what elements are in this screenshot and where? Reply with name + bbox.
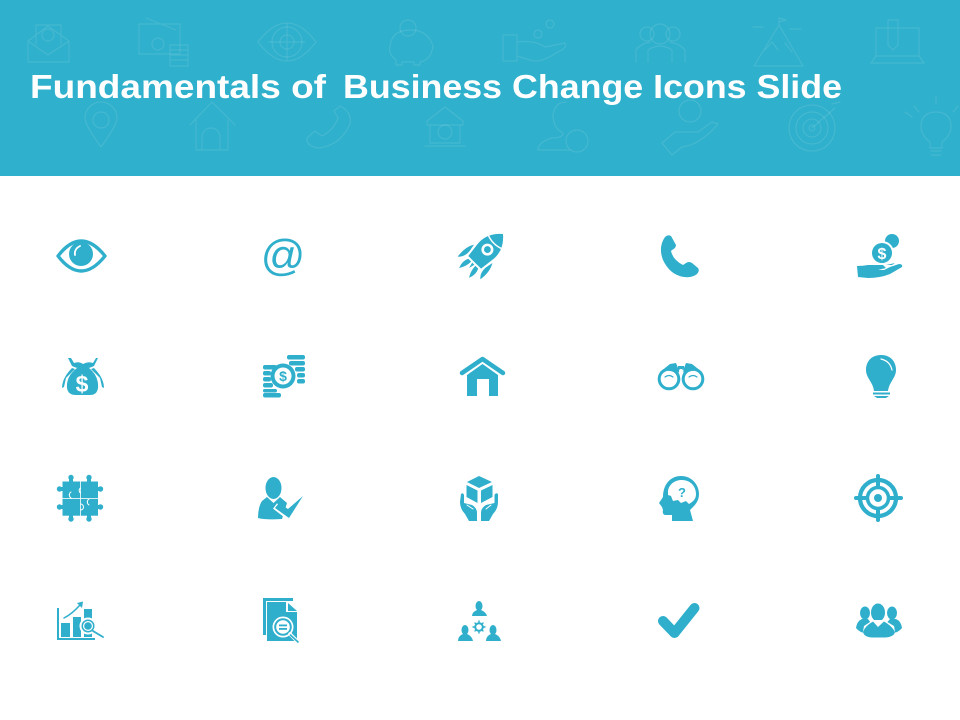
icon: check mark [663, 608, 694, 633]
icon grid [57, 222, 902, 642]
icon: money bag [62, 358, 104, 397]
icon: target crosshair [856, 476, 901, 520]
icon: team [856, 602, 902, 638]
icon: head with question mark: ? [678, 485, 686, 500]
icon: phone [661, 235, 699, 277]
title: Fundamentals of [30, 68, 327, 105]
icon: person with check [258, 477, 304, 519]
icon: coin stacks: $ [279, 368, 287, 384]
icon: rocket [452, 222, 515, 285]
icon: eye [58, 241, 105, 271]
icon: light bulb [866, 355, 896, 398]
icon: chart with magnifier [57, 602, 103, 640]
icon: money bag: $ [76, 371, 89, 397]
icon: hand with coins: $ [878, 246, 887, 263]
icon: three people with gear [458, 601, 501, 641]
icon: head with question mark [659, 476, 699, 521]
icon: hands holding cube [460, 476, 498, 521]
icon: house [462, 359, 503, 396]
header banner [0, 0, 960, 176]
icon: document search [263, 598, 298, 642]
title: Business Change Icons Slide [343, 68, 842, 105]
title [30, 68, 842, 105]
icon: coin stacks [263, 355, 305, 398]
icon: binoculars [659, 363, 703, 389]
icon: hand with coins [857, 234, 902, 278]
watermark icons [28, 18, 958, 155]
icon: puzzle [57, 475, 103, 522]
icon: at sign: @ [260, 231, 305, 280]
